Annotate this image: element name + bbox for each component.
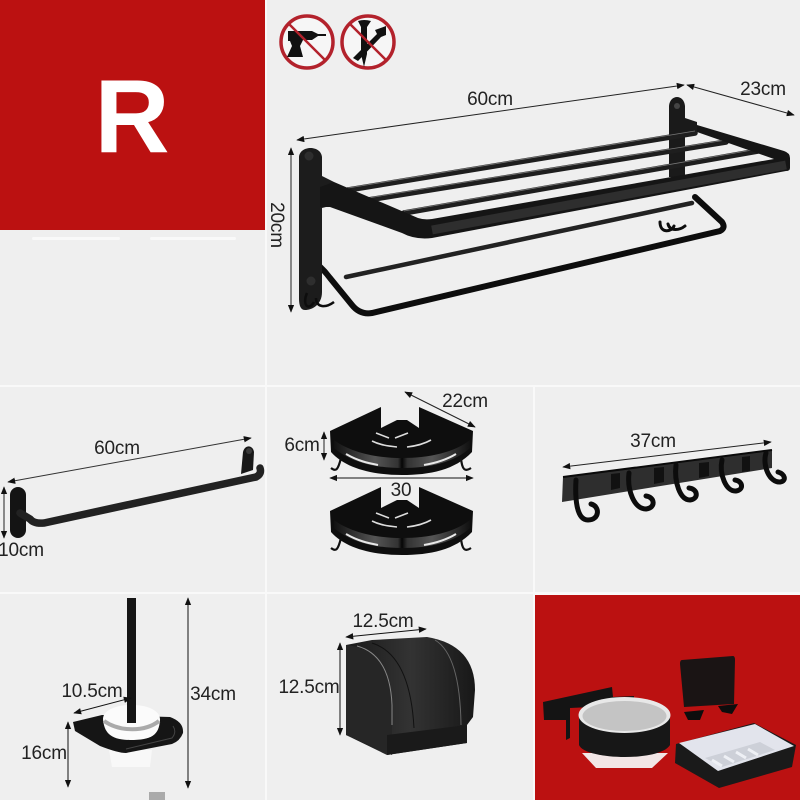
tumbler holder [543, 687, 670, 768]
dimension arrow: top 12.5cm: 12.5cm [352, 611, 414, 632]
soap dish [675, 723, 796, 788]
dimension arrow: 37cm: 37cm [630, 431, 676, 452]
panel: folding towel rack [266, 0, 800, 385]
dimension arrow: 6cm: 6cm [284, 435, 320, 456]
top rack rails [320, 125, 790, 238]
dimension arrow: 34cm: 34cm [190, 684, 236, 705]
panel: red accessories [535, 595, 800, 800]
heading: R: R [94, 59, 170, 175]
dimension arrow: 60cm: 60cm [94, 438, 140, 459]
dimension arrow: side 12.5cm [278, 643, 340, 735]
back bracket [669, 97, 697, 177]
lower towel bar [302, 197, 724, 313]
dimension arrow: 20cm: 20cm [266, 202, 287, 248]
dimension arrow: 10.5cm [61, 681, 131, 713]
dimension arrow: 23cm [687, 79, 794, 115]
dimension arrow: 60cm: 60cm [467, 89, 513, 110]
dimension arrow: 16cm [21, 722, 68, 787]
left bracket [299, 148, 334, 310]
dimension arrow: 30: 30 [391, 480, 411, 501]
dimension arrow: 16cm: 16cm [21, 743, 67, 764]
panel: toilet brush [0, 594, 265, 800]
dimension arrow: 10.5cm: 10.5cm [61, 681, 123, 702]
dimension arrow: 22cm [405, 391, 488, 427]
icon: no drilling [281, 16, 333, 68]
panel: corner shelves [267, 387, 533, 592]
towel bar drawing [10, 446, 260, 538]
dimension arrow: 10cm [0, 487, 44, 561]
toilet brush drawing [73, 598, 183, 767]
dimension arrow: 6cm [284, 432, 324, 460]
dimension arrow: 60cm [297, 85, 684, 140]
gray tab [149, 792, 165, 800]
panel: toilet paper holder [267, 594, 533, 800]
panel: towel bar [0, 387, 265, 592]
hook rail drawing [562, 450, 784, 520]
panel: hook rail [535, 387, 800, 592]
dimension arrow: 37cm [563, 431, 771, 467]
bottom shelf [330, 487, 473, 555]
razor hook plate [680, 656, 738, 720]
panel: red brand block [0, 0, 265, 230]
top shelf [330, 407, 473, 475]
dimension arrow: side 12.5cm: 12.5cm [278, 677, 340, 698]
paper holder drawing [346, 637, 475, 755]
dimension arrow: top 12.5cm [346, 611, 426, 637]
dimension arrow: 60cm [8, 438, 251, 482]
dimension arrow: 23cm: 23cm [740, 79, 786, 100]
panel: empty area below red block [0, 230, 265, 385]
dimension arrow: 22cm: 22cm [442, 391, 488, 412]
icon: no screws [342, 16, 394, 68]
